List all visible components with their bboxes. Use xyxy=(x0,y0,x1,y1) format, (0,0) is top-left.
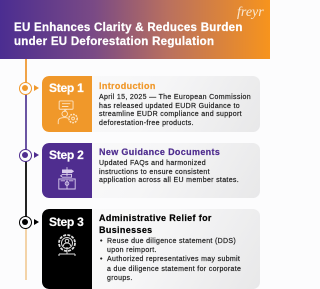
step 3 label: Step 3 xyxy=(49,215,84,229)
step 1 text: April 15, 2025 — The European Commission xyxy=(99,94,251,101)
panel: step 2 xyxy=(42,143,260,198)
step 2 text: Updated FAQs and harmonized xyxy=(99,160,206,167)
arrow 3 xyxy=(34,219,39,225)
step 1 label: Step 1 xyxy=(49,81,84,95)
title: EU Enhances Clarity & Reduces Burden xyxy=(14,22,243,34)
marker 1 xyxy=(19,82,32,94)
marker 2 xyxy=(19,148,32,162)
marker 3 xyxy=(19,216,32,228)
arrow 2 xyxy=(34,152,39,158)
step 2 label: Step 2 xyxy=(49,148,84,162)
panel: step 1 xyxy=(42,76,260,132)
step 3 bullet list: groups. xyxy=(107,275,133,282)
step 3 heading: Administrative Relief for xyxy=(99,213,212,223)
step 1 heading: Introduction xyxy=(99,81,156,91)
title xyxy=(14,22,243,48)
step 2 tab xyxy=(42,143,92,198)
step 2 text: instructions to ensure consistent xyxy=(99,169,210,176)
step 3 bullet list xyxy=(100,237,241,282)
arrow 1 xyxy=(34,85,39,91)
step 3 heading xyxy=(99,213,212,234)
step 2 text xyxy=(99,159,239,184)
icon: gear with person and network xyxy=(58,234,76,256)
timeline xyxy=(25,59,26,280)
step 2 heading: New Guidance Documents xyxy=(99,147,220,157)
step 3 bullet list: Reuse due diligence statement (DDS) xyxy=(107,238,236,245)
step 3 bullet list: upon reimport. xyxy=(107,247,157,254)
step 3 tab xyxy=(42,209,92,289)
step 2 text: application across all EU member states. xyxy=(99,177,239,184)
step 3 bullet list: a due diligence statement for corporate xyxy=(107,266,241,273)
step 1 text: has released updated EUDR Guidance to xyxy=(99,102,240,110)
bullet 1: • xyxy=(100,238,103,245)
title: under EU Deforestation Regulation xyxy=(14,36,214,48)
step 1 text xyxy=(98,93,251,127)
bullet 2: • xyxy=(100,256,103,263)
step 1 tab xyxy=(42,76,92,132)
icon: person with speech bubble and gear xyxy=(58,100,78,124)
panel: step 3 xyxy=(42,209,260,289)
logo: freyr xyxy=(237,5,264,20)
step 1 text: streamline EUDR compliance and support xyxy=(99,111,242,118)
header banner xyxy=(0,0,270,59)
step 3 heading: Businesses xyxy=(99,224,153,234)
step 3 bullet list: Authorized representatives may submit xyxy=(107,256,240,263)
icon: signpost on book xyxy=(58,167,76,190)
step 1 text: deforestation-free products. xyxy=(99,120,194,126)
